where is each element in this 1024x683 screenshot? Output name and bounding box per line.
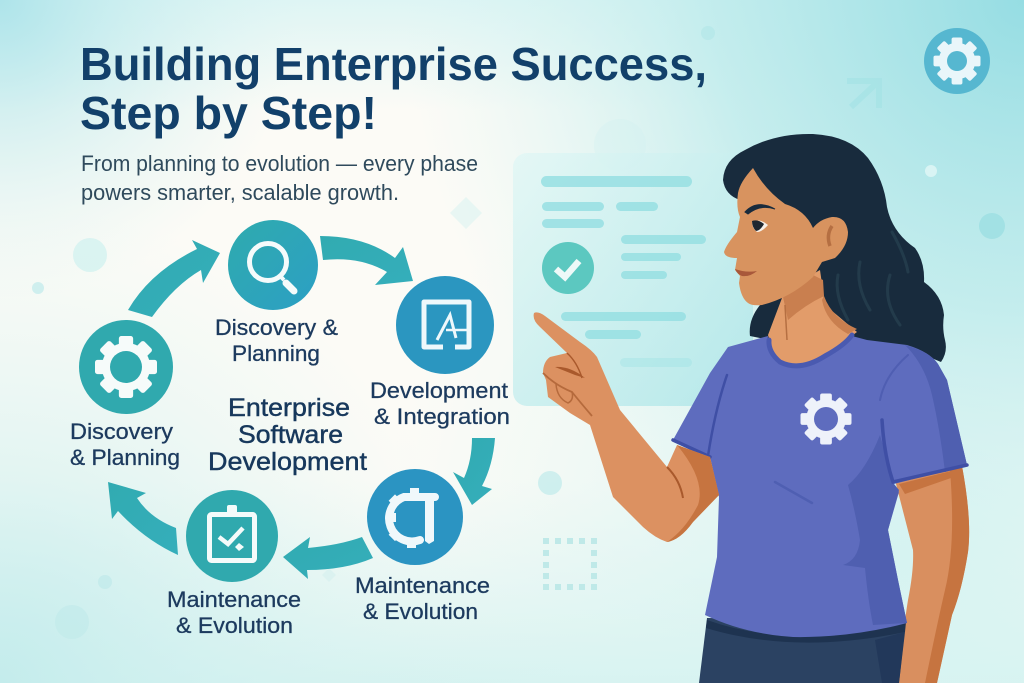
step: maintenance icon bbox=[367, 469, 463, 565]
label: development and integration: & Integration bbox=[374, 404, 510, 429]
title: Step by Step! bbox=[80, 87, 377, 139]
left arm and pointing hand bbox=[534, 312, 719, 542]
label: development and integration: Development bbox=[370, 378, 508, 403]
label: maintenance and evolution right: Maintenance bbox=[355, 573, 490, 598]
neck shadow bbox=[783, 275, 824, 320]
right arm bbox=[895, 466, 969, 683]
label: discovery and planning left: & Planning bbox=[70, 445, 180, 470]
shirt gear logo bbox=[800, 394, 852, 444]
subtitle bbox=[81, 151, 478, 205]
step: development icon bbox=[396, 276, 494, 374]
label: discovery and planning top bbox=[215, 315, 338, 366]
eye bbox=[752, 220, 768, 232]
person illustration bbox=[534, 134, 969, 683]
arrow: gear to discovery bbox=[128, 240, 220, 317]
label: discovery and planning left bbox=[70, 419, 180, 470]
shirt trim bbox=[673, 335, 967, 503]
label: discovery and planning top: Planning bbox=[232, 341, 320, 366]
face bbox=[724, 168, 848, 305]
arrow: maintenance to clipboard bbox=[283, 537, 373, 579]
lips bbox=[735, 269, 757, 276]
label: development and integration bbox=[370, 378, 510, 429]
icon: top-right arrow bbox=[847, 81, 879, 108]
label: maintenance and evolution left: Maintenance bbox=[167, 587, 301, 612]
step: clipboard icon bbox=[186, 490, 278, 582]
pants bbox=[699, 618, 906, 683]
arrow: discovery to development bbox=[320, 236, 413, 285]
title: Building Enterprise Success, bbox=[80, 38, 707, 90]
panel: background checklist document bbox=[513, 153, 753, 406]
subtitle: From planning to evolution — every phase bbox=[81, 151, 478, 176]
hair bbox=[723, 134, 946, 362]
step: magnifier bbox=[228, 220, 318, 310]
center label: Enterprise bbox=[228, 394, 350, 422]
label: maintenance and evolution left: & Evolution bbox=[176, 613, 293, 638]
label: maintenance and evolution right bbox=[355, 573, 490, 624]
label: maintenance and evolution left bbox=[167, 587, 301, 638]
subtitle: powers smarter, scalable growth. bbox=[81, 180, 399, 205]
center label: Software bbox=[238, 421, 343, 449]
label: maintenance and evolution right: & Evolution bbox=[363, 599, 478, 624]
hair highlights bbox=[837, 232, 908, 325]
center label bbox=[208, 394, 367, 476]
label: discovery and planning left: Discovery bbox=[70, 419, 173, 444]
icon: check circle bbox=[542, 242, 594, 294]
arrow: development to maintenance bbox=[453, 438, 495, 505]
dotted square decoration bbox=[543, 538, 597, 590]
title bbox=[80, 38, 707, 139]
arrow: clipboard to gear bbox=[108, 482, 178, 555]
shirt bbox=[673, 336, 967, 637]
step: gear bbox=[79, 320, 173, 414]
neck bbox=[768, 270, 857, 374]
shirt shadow bbox=[843, 435, 907, 625]
label: discovery and planning top: Discovery & bbox=[215, 315, 338, 340]
cycle diagram bbox=[70, 220, 510, 638]
eyebrow bbox=[745, 205, 775, 214]
center label: Development bbox=[208, 448, 367, 476]
ear detail bbox=[828, 226, 832, 246]
icon: top-right gear badge bbox=[924, 28, 990, 94]
